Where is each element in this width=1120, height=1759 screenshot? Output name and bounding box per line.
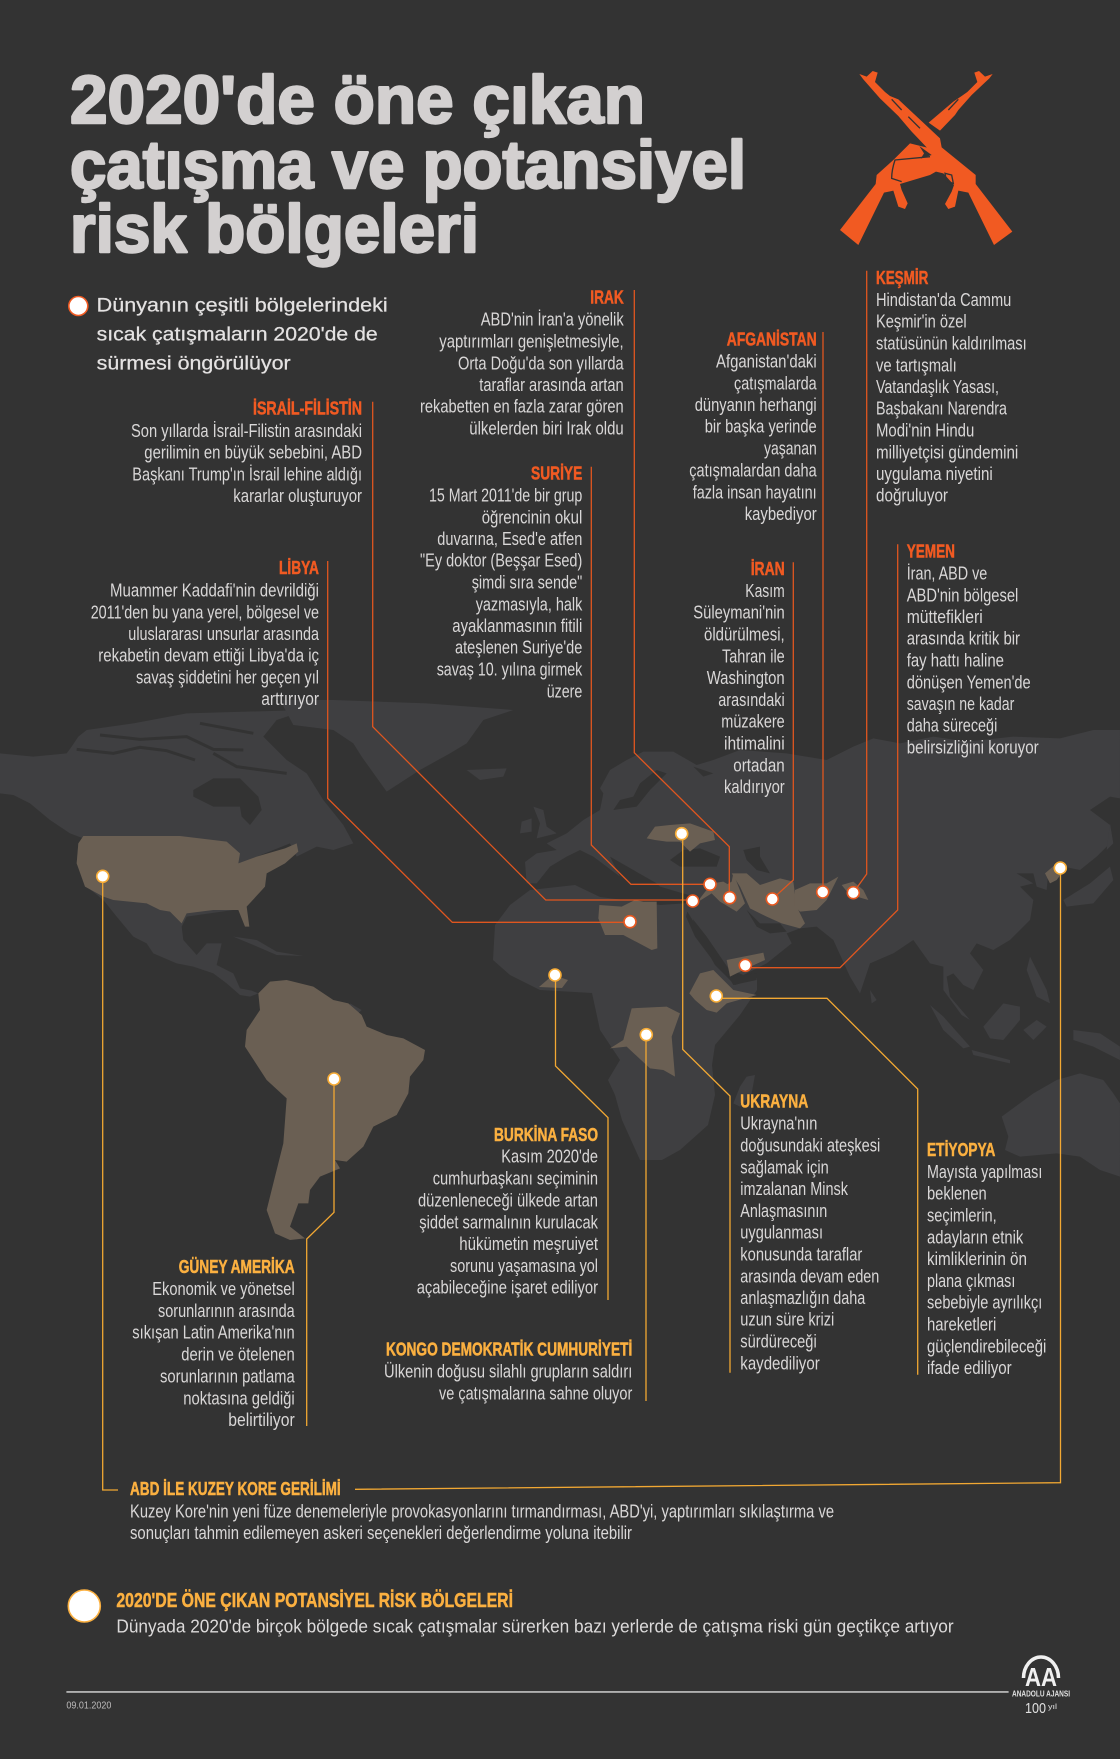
body text: ve tartışmalı bbox=[876, 355, 957, 375]
body text: fazla insan hayatını bbox=[693, 482, 817, 502]
heading: İSRAİL-FİLİSTİN bbox=[253, 398, 362, 418]
connector: Etiyopya bbox=[716, 998, 918, 1375]
logo: Anadolu Ajansı: 100 bbox=[1025, 1700, 1046, 1717]
body text: beklenen bbox=[927, 1184, 987, 1204]
body text: Hindistan'da Cammu bbox=[876, 290, 1011, 310]
intro paragraph: sıcak çatışmaların 2020'de de bbox=[97, 324, 378, 346]
panel: Afganistan bbox=[689, 329, 817, 524]
marker: Yemen bbox=[739, 959, 751, 971]
connector: Yemen bbox=[745, 544, 898, 968]
intro paragraph bbox=[97, 295, 388, 375]
body text: seçimlerin, bbox=[927, 1205, 997, 1225]
panel: Burkina Faso bbox=[417, 1125, 599, 1298]
body text bbox=[740, 1114, 880, 1373]
heading: GÜNEY AMERİKA bbox=[179, 1257, 295, 1277]
marker: Burkina Faso bbox=[549, 969, 561, 981]
body text: anlaşmazlığın daha bbox=[740, 1288, 866, 1308]
intro paragraph: Dünyanın çeşitli bölgelerindeki bbox=[97, 295, 388, 317]
body text: doğusundaki ateşkesi bbox=[740, 1136, 880, 1156]
body text: belirtiliyor bbox=[228, 1410, 295, 1430]
body text: kaldırıyor bbox=[724, 777, 785, 797]
country highlight: South America bbox=[245, 980, 425, 1240]
body text: sürdüreceği bbox=[740, 1332, 817, 1352]
body text: Başkanı Trump'ın İsrail lehine aldığı bbox=[132, 464, 362, 484]
body text: Dünyada 2020'de birçok bölgede sıcak çatışmalar sürerken bazı yerlerde de çatışma riski gün geçtikçe artıyor bbox=[116, 1615, 954, 1636]
body text: Keşmir'in özel bbox=[876, 312, 967, 332]
body text: duvarına, Esed'e atfen bbox=[437, 529, 582, 549]
body text: şimdi sıra sende" bbox=[472, 572, 582, 592]
body text: Orta Doğu'da son yıllarda bbox=[458, 353, 625, 373]
body text: Ukrayna'nın bbox=[740, 1114, 817, 1134]
connector: Burkina Faso bbox=[556, 975, 608, 1300]
body text: hükümetin meşruiyet bbox=[459, 1234, 598, 1254]
body text: yazmasıyla, halk bbox=[476, 594, 583, 614]
body text: kaybediyor bbox=[745, 504, 817, 524]
body text: 15 Mart 2011'de bir grup bbox=[429, 485, 582, 505]
marker: Ukrayna bbox=[676, 828, 688, 840]
body text: düzenleneceği ülkede artan bbox=[418, 1190, 598, 1210]
heading: ETİYOPYA bbox=[927, 1140, 995, 1160]
panel: Keşmir bbox=[876, 268, 1027, 506]
body text: ABD'nin İran'a yönelik bbox=[481, 310, 625, 330]
icon: large bullet bbox=[68, 1590, 100, 1622]
connector: Irak bbox=[634, 290, 729, 897]
panel: Yemen bbox=[907, 541, 1039, 758]
body text: şiddet sarmalının kurulacak bbox=[419, 1212, 599, 1232]
body text: müttefikleri bbox=[907, 607, 983, 627]
heading: KONGO DEMOKRATİK CUMHURİYETİ bbox=[386, 1340, 632, 1360]
body text: Muammer Kaddafi'nin devrildiği bbox=[110, 580, 319, 600]
body text: ülkelerden biri Irak oldu bbox=[469, 418, 624, 438]
world map bbox=[0, 700, 1120, 1240]
body text: dönüşen Yemen'de bbox=[907, 672, 1031, 692]
icon: crossed rifles bbox=[840, 71, 1012, 245]
panel: İran bbox=[693, 559, 785, 797]
body text: rekabetin devam ettiği Libya'da iç bbox=[98, 646, 319, 666]
connector: Keşmir bbox=[853, 271, 867, 893]
body text: güçlendirebileceği bbox=[927, 1336, 1046, 1356]
country highlight: Libya bbox=[598, 900, 657, 950]
body text bbox=[132, 1279, 296, 1430]
body text: ayaklanmasının fitili bbox=[452, 616, 582, 636]
body text: gerilimin en büyük sebebini, ABD bbox=[144, 443, 362, 463]
body text: ve çatışmalarına sahne oluyor bbox=[439, 1383, 632, 1403]
panel: Suriye bbox=[420, 463, 583, 701]
body text: Son yıllarda İsrail-Filistin arasındaki bbox=[131, 421, 362, 441]
intro text bbox=[69, 295, 388, 375]
panel: potansiyel risk bölgeleri bbox=[68, 1589, 954, 1636]
body text: İran, ABD ve bbox=[907, 563, 987, 583]
body text: Kuzey Kore'nin yeni füze denemeleriyle provokasyonlarını tırmandırması, ABD'yi, yaptırımları sıkılaştırma ve bbox=[130, 1501, 834, 1521]
country highlight: Syria bbox=[700, 882, 732, 901]
heading: SURİYE bbox=[531, 463, 582, 483]
body text: uluslararası unsurlar arasında bbox=[128, 624, 320, 644]
body text bbox=[384, 1362, 632, 1403]
country highlight: Kashmir bbox=[842, 882, 868, 900]
body text: sonuçları tahmin edilemeyen askeri seçenekleri değerlendirme yoluna itebilir bbox=[130, 1523, 632, 1543]
body text: bir başka yerinde bbox=[705, 417, 817, 437]
country highlight: Afghanistan bbox=[795, 877, 838, 912]
body text: sıkışan Latin Amerika'nın bbox=[132, 1323, 295, 1343]
heading: LİBYA bbox=[279, 558, 319, 578]
panel: İsrail-Filistin bbox=[131, 398, 362, 506]
logo: Anadolu Ajansı: AA bbox=[1025, 1662, 1057, 1692]
logo: Anadolu Ajansı: ANADOLU AJANSI bbox=[1012, 1690, 1070, 1698]
body text: savaşın ne kadar bbox=[907, 694, 1014, 714]
connector: Güney Amerika bbox=[307, 1079, 334, 1426]
body text: Anlaşmasının bbox=[740, 1201, 827, 1221]
body text: sorunlarının arasında bbox=[158, 1301, 295, 1321]
body text: fay hattı haline bbox=[907, 650, 1004, 670]
body text: Kasım bbox=[745, 581, 785, 601]
panel: ABD ile Kuzey Kore gerilimi bbox=[130, 1479, 834, 1543]
body text: ihtimalini bbox=[724, 733, 785, 753]
body text: Mayısta yapılması bbox=[927, 1162, 1042, 1182]
body text: dünyanın herhangi bbox=[695, 395, 817, 415]
country highlight: Ukraine bbox=[647, 823, 715, 852]
marker: Irak bbox=[724, 892, 736, 904]
body text: Washington bbox=[707, 668, 785, 688]
panel: Güney Amerika bbox=[132, 1257, 296, 1430]
connector: Libya bbox=[328, 561, 630, 922]
body text: daha süreceği bbox=[907, 716, 997, 736]
body text: sağlamak için bbox=[740, 1157, 829, 1177]
body text: arasında devam eden bbox=[740, 1266, 879, 1286]
title: risk bölgeleri bbox=[70, 191, 479, 267]
body text bbox=[693, 581, 785, 797]
date: 09.01.2020 bbox=[66, 1701, 112, 1712]
body text: kaydediliyor bbox=[740, 1353, 820, 1373]
body text: çatışmalardan daha bbox=[689, 460, 817, 480]
marker: İsrail-Filistin bbox=[687, 895, 699, 907]
panel: Etiyopya bbox=[927, 1140, 1046, 1378]
body text: uygulama niyetini bbox=[876, 464, 993, 484]
body text bbox=[91, 580, 320, 709]
body text: hareketleri bbox=[927, 1314, 996, 1334]
title: çatışma ve potansiyel bbox=[70, 127, 746, 203]
connector: Afganistan bbox=[822, 332, 824, 892]
panel: Irak bbox=[420, 287, 625, 438]
marker: Kongo bbox=[640, 1029, 652, 1041]
body text bbox=[927, 1162, 1046, 1378]
marker: Afganistan bbox=[817, 886, 829, 898]
body text: kararlar oluşturuyor bbox=[233, 486, 362, 506]
body text: plana çıkması bbox=[927, 1271, 1015, 1291]
body text: Tahran ile bbox=[722, 646, 785, 666]
body text: kimliklerinin ön bbox=[927, 1249, 1027, 1269]
body text: "Ey doktor (Beşşar Esed) bbox=[420, 551, 582, 571]
body text bbox=[876, 290, 1027, 506]
country highlight: DR Congo bbox=[610, 1007, 680, 1077]
connector: ABD left bbox=[103, 876, 118, 1490]
panel: Libya bbox=[91, 558, 320, 709]
marker: Keşmir bbox=[847, 887, 859, 899]
body text: arasındaki bbox=[718, 690, 785, 710]
body text: adayların etnik bbox=[927, 1227, 1024, 1247]
marker: ABD bbox=[97, 870, 109, 882]
connector: İran bbox=[772, 562, 793, 899]
body text: 2011'den bu yana yerel, bölgesel ve bbox=[91, 602, 319, 622]
marker: Etiyopya bbox=[710, 990, 722, 1002]
country highlight: Iraq bbox=[712, 873, 745, 912]
logo: Anadolu Ajansı bbox=[1012, 1657, 1070, 1717]
body text: Kasım 2020'de bbox=[501, 1147, 598, 1167]
heading: ABD İLE KUZEY KORE GERİLİMİ bbox=[130, 1479, 341, 1499]
body text: Başbakanı Narendra bbox=[876, 399, 1008, 419]
body text: ABD'nin bölgesel bbox=[907, 585, 1018, 605]
panel: Ukrayna bbox=[740, 1092, 880, 1373]
heading: KEŞMİR bbox=[876, 268, 928, 288]
body text: rekabetten en fazla zarar gören bbox=[420, 397, 624, 417]
body text: imzalanan Minsk bbox=[740, 1179, 849, 1199]
body text bbox=[689, 351, 817, 524]
country highlight: Yemen bbox=[727, 953, 765, 977]
icon: intro bullet bbox=[69, 296, 88, 316]
body text bbox=[130, 1501, 834, 1543]
title: 2020'de öne çıkan bbox=[70, 62, 645, 138]
body text: sebebiyle ayrılıkçı bbox=[927, 1293, 1042, 1313]
body text: Modi'nin Hindu bbox=[876, 421, 974, 441]
body text: sorunlarının patlama bbox=[160, 1366, 296, 1386]
heading: UKRAYNA bbox=[740, 1092, 808, 1112]
body text: müzakere bbox=[721, 712, 785, 732]
heading: YEMEN bbox=[907, 541, 955, 561]
body text: belirsizliğini koruyor bbox=[907, 738, 1039, 758]
body text: ifade ediliyor bbox=[927, 1358, 1012, 1378]
title bbox=[70, 62, 746, 267]
body text: cumhurbaşkanı seçiminin bbox=[433, 1169, 598, 1189]
body text: ateşlenen Suriye'de bbox=[455, 638, 582, 658]
heading: BURKİNA FASO bbox=[494, 1125, 598, 1145]
body text: Süleymani'nin bbox=[693, 603, 785, 623]
body text: yaşanan bbox=[764, 439, 817, 459]
body text: arasında kritik bir bbox=[907, 629, 1020, 649]
country highlight: Iran bbox=[732, 873, 805, 928]
heading: IRAK bbox=[590, 287, 624, 307]
marker: Libya bbox=[624, 916, 636, 928]
body text: uygulanması bbox=[740, 1223, 823, 1243]
logo: Anadolu Ajansı: yıl bbox=[1048, 1704, 1058, 1711]
country highlight: USA bbox=[77, 836, 298, 927]
panel: Kongo Demokratik Cumhuriyeti bbox=[384, 1340, 632, 1403]
country highlight: North Korea bbox=[1045, 863, 1067, 883]
connector: İsrail-Filistin bbox=[373, 402, 692, 900]
body text: konusunda taraflar bbox=[740, 1244, 862, 1264]
connector: Kuzey Kore right bbox=[355, 868, 1060, 1489]
body text bbox=[420, 310, 625, 438]
heading: İRAN bbox=[751, 559, 785, 579]
body text: Ülkenin doğusu silahlı grupların saldırı bbox=[384, 1362, 632, 1382]
heading: AFGANİSTAN bbox=[727, 329, 817, 349]
body text bbox=[417, 1147, 599, 1298]
intro paragraph: sürmesi öngörülüyor bbox=[97, 353, 291, 375]
body text: Afganistan'daki bbox=[716, 351, 817, 371]
body text: uzun süre krizi bbox=[740, 1310, 834, 1330]
body text: taraflar arasında artan bbox=[479, 375, 624, 395]
body text: öğrencinin okul bbox=[482, 507, 582, 527]
body text: arttırıyor bbox=[261, 689, 319, 709]
connector: Ukrayna bbox=[683, 834, 730, 1373]
body text: öldürülmesi, bbox=[704, 625, 785, 645]
body text: sorunu yaşamasına yol bbox=[450, 1256, 598, 1276]
country highlight: Ethiopia bbox=[689, 970, 757, 1013]
body text bbox=[907, 563, 1039, 758]
body text: yaptırımları genişletmesiyle, bbox=[439, 331, 624, 351]
body text: çatışmalarda bbox=[734, 373, 817, 393]
body text: savaş 10. yılına girmek bbox=[437, 659, 583, 679]
body text: statüsünün kaldırılması bbox=[876, 333, 1027, 353]
marker: İran bbox=[766, 893, 778, 905]
marker: Güney Amerika bbox=[328, 1073, 340, 1085]
body text bbox=[131, 421, 362, 506]
heading: 2020'DE ÖNE ÇIKAN POTANSİYEL RİSK BÖLGELERİ bbox=[116, 1589, 513, 1612]
body text: noktasına geldiği bbox=[183, 1388, 295, 1408]
body text bbox=[420, 485, 583, 701]
body text: ortadan bbox=[733, 755, 785, 775]
connector: Kongo bbox=[645, 1035, 647, 1401]
body text: açabileceğine işaret ediliyor bbox=[417, 1278, 598, 1298]
body text: derin ve ötelenen bbox=[181, 1345, 295, 1365]
body text: Ekonomik ve yönetsel bbox=[152, 1279, 295, 1299]
body text: üzere bbox=[547, 681, 582, 701]
body text: savaş şiddetini her geçen yıl bbox=[136, 667, 319, 687]
body text: doğruluyor bbox=[876, 486, 948, 506]
body text: Vatandaşlık Yasası, bbox=[876, 377, 999, 397]
body text: milliyetçisi gündemini bbox=[876, 442, 1018, 462]
marker: Kuzey Kore bbox=[1054, 862, 1066, 874]
marker: Suriye bbox=[704, 878, 716, 890]
connector: Suriye bbox=[591, 467, 710, 884]
